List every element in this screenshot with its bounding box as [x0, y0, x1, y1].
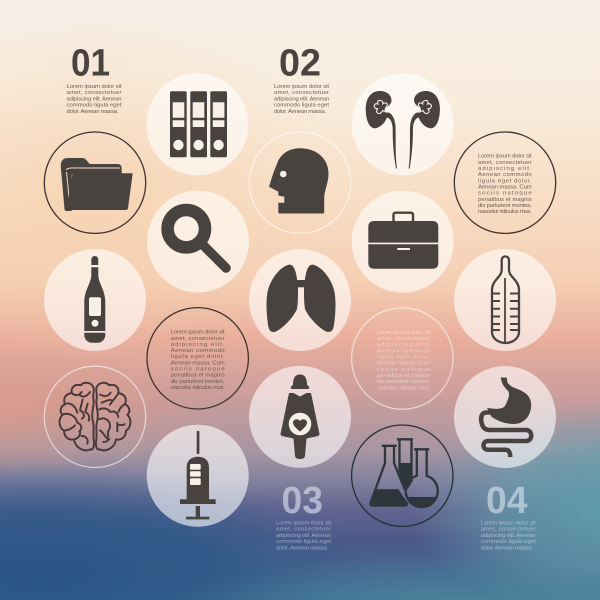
text block 04: Lorem ipsum dolor sit [481, 520, 536, 526]
text block in circle: Aenean commodo [377, 348, 431, 354]
panel: binders [146, 73, 248, 175]
number 01: 01 [71, 42, 110, 84]
text block in circle: Aenean commodo [478, 172, 532, 178]
panel: flasks [352, 425, 453, 526]
text block 03: dolor. Aenean massa. [276, 545, 328, 551]
text block 03: amet, consectetuer [276, 527, 331, 533]
icon: briefcase [368, 213, 438, 269]
icon: magnifier [168, 210, 226, 268]
text block in circle: nascetur ridiculus mus. [478, 209, 532, 215]
text block 01: amet, consectetuer [66, 90, 122, 96]
text block in circle: nascetur ridiculus mus. [377, 385, 431, 391]
text block 01: adipiscing elit. Aenean [66, 96, 122, 102]
text block in circle: amet, consectetuer [377, 336, 430, 342]
number 04: 04 [486, 480, 528, 522]
panel: briefcase [352, 191, 454, 293]
icon: glass thermometer [492, 256, 519, 343]
text block 03: commodo ligula eget [276, 539, 331, 545]
text block 02: Lorem ipsum dolor sit [274, 84, 329, 90]
text block in circle: penatibus et magnis [377, 373, 430, 379]
panel: lungs [249, 249, 351, 351]
left kidney and ureter [366, 91, 397, 168]
text block 04: dolor. Aenean massa. [481, 545, 533, 551]
text block in circle: adipiscing elit. [171, 342, 225, 348]
text block 04 [481, 520, 536, 551]
icon: brain [60, 383, 130, 450]
text block in circle: Aenean commodo [171, 348, 225, 354]
text block 01: commodo ligula eget [66, 103, 122, 109]
section 01: number and text [66, 42, 122, 115]
icon: folder [61, 158, 133, 211]
text block 01: dolor. Aenean massa. [66, 109, 119, 115]
text block in circle: ligula eget dolor. [478, 178, 532, 184]
text block in circle [478, 154, 532, 215]
number 02: 02 [279, 42, 321, 84]
text block in circle: penatibus et magnis [171, 373, 225, 379]
number 03: 03 [282, 480, 323, 522]
text block in circle: adipiscing elit. [377, 342, 431, 348]
panel: syringe [147, 425, 249, 527]
panel: digital thermometer [44, 249, 146, 351]
text block in circle: sociis natoque [171, 366, 225, 372]
text block 01: Lorem ipsum dolor sit [66, 84, 122, 90]
text block in circle: nascetur ridiculus mus. [171, 385, 225, 391]
panel: kidneys [352, 73, 454, 175]
text block in circle: ligula eget dolor. [377, 354, 431, 360]
section 02: number and text [274, 42, 329, 115]
panel: folder [44, 132, 146, 233]
text block in circle: amet, consectetuer [478, 160, 532, 166]
section 04: number and text [481, 480, 536, 551]
text block 02: commodo ligula eget [274, 103, 329, 109]
text block 03: adipiscing elit. Aenean [276, 533, 331, 539]
text block in circle: ligula eget dolor. [171, 354, 225, 360]
icon: syringe [180, 431, 216, 519]
erlenmeyer flask [369, 446, 408, 507]
text block 04: commodo ligula eget [481, 539, 536, 545]
section 03: number and text [276, 480, 331, 551]
text block in circle: adipiscing elit. [478, 166, 532, 172]
text block 01 [66, 84, 122, 115]
icon: lungs [266, 265, 336, 332]
test tube [397, 439, 413, 490]
panel: brain [44, 366, 146, 467]
panel: pregnant woman [249, 366, 351, 468]
panel: magnifier [147, 190, 249, 292]
panel: glass thermometer [454, 249, 556, 351]
text block 04: amet, consectetuer [481, 527, 536, 533]
icon: binders [170, 91, 227, 157]
text block 02: dolor. Aenean massa. [274, 109, 326, 115]
text block in circle [171, 330, 225, 391]
panel: text circle left [147, 308, 248, 409]
text block in circle: Lorem ipsum dolor sit [171, 330, 225, 336]
text block in circle: Aenean massa. Cum [171, 360, 225, 366]
text block 02: amet, consectetuer [274, 90, 329, 96]
text block in circle: sociis natoque [478, 191, 532, 197]
panel: head [249, 132, 351, 233]
round flask [406, 449, 438, 508]
panel: text circle right [352, 308, 453, 409]
text block in circle: penatibus et magnis [478, 197, 532, 203]
icon: digital thermometer [84, 256, 105, 343]
text block in circle: dis parturient montes, [377, 379, 431, 385]
text block 03: Lorem ipsum dolor sit [276, 520, 331, 526]
text block in circle: sociis natoque [377, 367, 431, 373]
text block in circle [377, 330, 431, 391]
icon: flasks [369, 439, 438, 508]
text block 02: adipiscing elit. Aenean [274, 96, 329, 102]
panel: stomach [454, 366, 556, 468]
text block in circle: Aenean massa. Cum [478, 184, 532, 190]
text block in circle: dis parturient montes, [478, 203, 532, 209]
text block in circle: amet, consectetuer [171, 336, 225, 342]
text block 04: adipiscing elit. Aenean [481, 533, 536, 539]
right kidney and ureter [409, 91, 440, 168]
icon: head [269, 148, 328, 214]
icon: pregnant woman [280, 374, 320, 459]
text block 02 [274, 84, 329, 115]
panel: text circle top right [454, 132, 556, 233]
icon: stomach and intestine [481, 378, 531, 457]
text block in circle: Lorem ipsum dolor sit [377, 330, 431, 336]
icon: kidneys [366, 91, 440, 168]
text block in circle: dis parturient montes, [171, 379, 225, 385]
text block 03 [276, 520, 331, 551]
text block in circle: Lorem ipsum dolor sit [478, 154, 532, 160]
text block in circle: Aenean massa. Cum [377, 361, 430, 367]
